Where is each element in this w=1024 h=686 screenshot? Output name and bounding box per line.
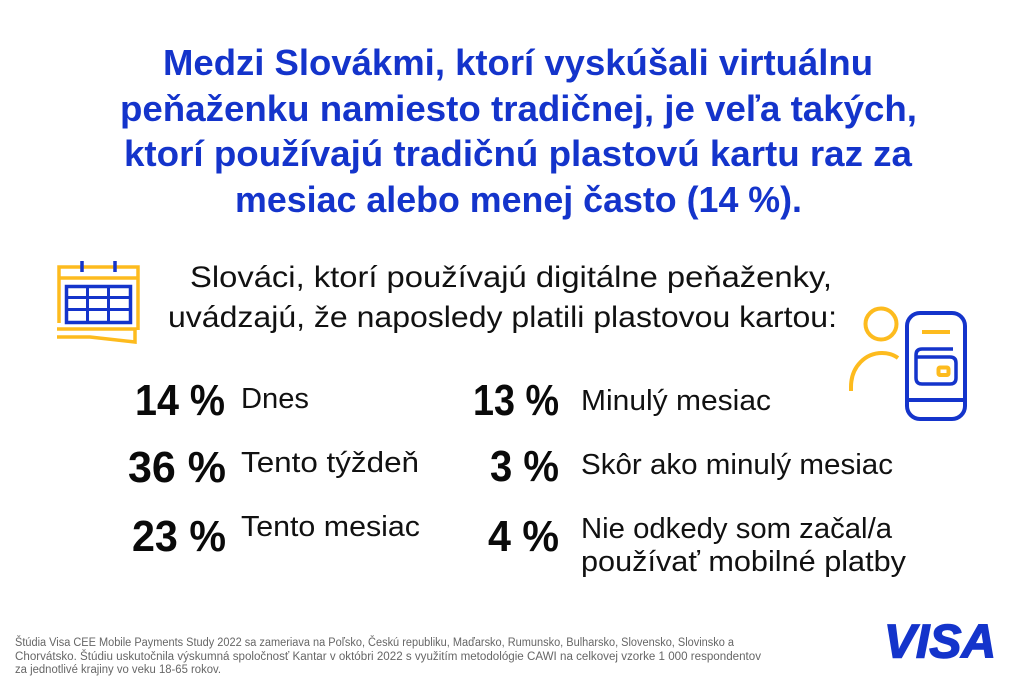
stat: not since started: používať mobilné platby: [581, 546, 907, 578]
footnote: Chorvátsko. Štúdiu uskutočnila výskumná spoločnosť Kantar v októbri 2022 s využitím metodológie CAWI na celkovej vzorke 1 000 respondentov: [15, 650, 761, 663]
stat: today: 14 %: [135, 376, 225, 425]
stat: before last month: [490, 442, 893, 491]
stat: this week: Tento týždeň: [241, 447, 419, 479]
stat: not since started: 4 %: [488, 512, 559, 561]
title: peňaženku namiesto tradičnej, je veľa takých,: [120, 88, 917, 129]
footnote: [15, 636, 761, 676]
icon: calendar: [57, 261, 138, 342]
title: mesiac alebo menej často (14 %).: [235, 179, 802, 220]
stat: not since started: Nie odkedy som začal/a: [581, 513, 893, 545]
stat: before last month: Skôr ako minulý mesiac: [581, 449, 893, 481]
stat: last month: [473, 376, 771, 425]
stat: today: [135, 376, 309, 425]
stat: this month: Tento mesiac: [241, 511, 420, 543]
logo: Visa: VISA: [884, 614, 996, 668]
stat: last month: 13 %: [473, 376, 559, 425]
stat: before last month: 3 %: [490, 442, 559, 491]
subtitle: [168, 261, 837, 334]
icon: person with phone wallet: [851, 308, 966, 419]
stat: this week: [128, 443, 419, 492]
title: Medzi Slovákmi, ktorí vyskúšali virtuálnu: [163, 42, 873, 83]
stat: this week: 36 %: [128, 443, 226, 492]
title: [120, 42, 917, 220]
subtitle: Slováci, ktorí používajú digitálne peňaženky,: [190, 261, 832, 294]
stat: today: Dnes: [241, 383, 309, 415]
stat: this month: [132, 511, 420, 561]
title: ktorí používajú tradičnú plastovú kartu raz za: [124, 133, 913, 174]
footnote: Štúdia Visa CEE Mobile Payments Study 2022 sa zameriava na Poľsko, Českú republiku, Maďarsko, Rumunsko, Bulharsko, Slovensko, Slovinsko a: [15, 636, 735, 649]
stat: last month: Minulý mesiac: [581, 385, 771, 417]
subtitle: uvádzajú, že naposledy platili plastovou kartou:: [168, 301, 837, 334]
stat: this month: 23 %: [132, 512, 226, 561]
stat: not since started: [488, 512, 907, 578]
footnote: za jednotlivé krajiny vo veku 18-65 rokov.: [15, 664, 221, 676]
